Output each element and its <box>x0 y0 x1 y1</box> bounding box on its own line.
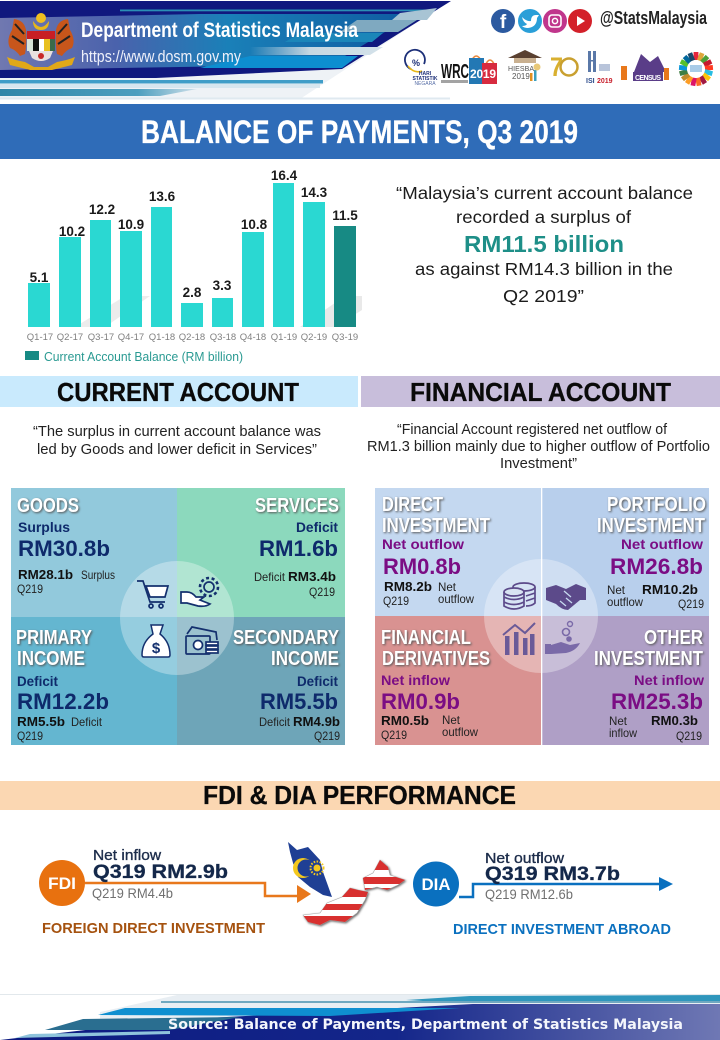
FDI figures: Net inflow <box>93 847 161 864</box>
primary income: Q219 <box>17 729 43 743</box>
financial derivatives: Net inflow <box>381 672 450 688</box>
bar chart: current account balance: 10.8 <box>241 217 268 232</box>
social icons <box>491 9 592 33</box>
goods: GOODS <box>17 495 79 517</box>
portfolio investment: RM10.2b <box>642 582 698 597</box>
bar chart: current account balance: Q1-19 <box>271 332 297 343</box>
FDI figures: Q319 RM2.9b <box>93 861 228 883</box>
icon: coin stacks <box>504 583 535 609</box>
text: financial account summary: “Financial Account registered net outflow of <box>397 421 668 438</box>
heading: FDI and DIA performance: FDI & DIA PERFORMANCE <box>203 780 516 810</box>
financial derivatives <box>381 627 490 742</box>
social icons: f <box>500 12 507 33</box>
direct investment: DIRECT <box>382 494 443 516</box>
primary income: Deficit <box>17 673 58 689</box>
secondary income: Deficit <box>259 715 291 729</box>
partner logos: 7 <box>550 52 563 82</box>
other investment: Net <box>609 714 628 728</box>
DIA figures: Net outflow <box>485 850 564 867</box>
text: current account summary: “The surplus in current account balance was <box>33 423 321 440</box>
other investment: Net inflow <box>634 672 704 688</box>
badge: FDI <box>39 860 85 906</box>
other investment: RM25.3b <box>611 689 703 714</box>
title band: BALANCE OF PAYMENTS, Q3 2019 <box>141 114 578 150</box>
bar chart: current account balance: 13.6 <box>149 189 176 204</box>
icon: hand with gear <box>181 578 218 606</box>
financial derivatives: DERIVATIVES <box>382 648 490 670</box>
secondary income: Q219 <box>314 729 340 743</box>
direct investment <box>382 494 490 608</box>
financial derivatives: Net <box>442 713 461 727</box>
icon: money bag: $ <box>152 640 161 657</box>
portfolio investment <box>597 494 706 611</box>
header banner <box>0 1 451 100</box>
title band <box>0 104 720 159</box>
partner logos: WRC <box>441 61 469 83</box>
header title: Department of Statistics Malaysia <box>81 19 358 42</box>
badge: DIA <box>413 862 459 906</box>
label: foreign direct investment: FOREIGN DIRECT INVESTMENT <box>42 920 265 937</box>
quote: current account surplus <box>396 183 693 306</box>
secondary income: RM4.9b <box>293 714 340 729</box>
icon: money bag <box>142 625 170 657</box>
other investment: RM0.3b <box>651 713 698 728</box>
other investment: INVESTMENT <box>594 648 703 670</box>
other investment: Q219 <box>676 729 702 743</box>
arrow: FDI flow <box>85 883 311 903</box>
partner logos: 2019 <box>597 78 613 85</box>
direct investment: Q219 <box>383 594 409 608</box>
primary income: RM12.2b <box>17 689 109 714</box>
goods: RM30.8b <box>18 536 110 561</box>
quote: current account surplus: “Malaysia’s current account balance <box>396 183 693 203</box>
text: financial account summary: RM1.3 billion mainly due to higher outflow of Portfolio <box>367 438 710 455</box>
portfolio investment: Q219 <box>678 597 704 611</box>
arrow: DIA flow <box>459 877 673 897</box>
services <box>254 495 339 599</box>
other investment: inflow <box>609 726 637 740</box>
bar chart: current account balance <box>25 168 362 364</box>
services: Deficit <box>296 519 338 535</box>
panel: financial account quadrants <box>375 488 709 745</box>
bar chart: current account balance: Q3-17 <box>88 332 114 343</box>
icon: hand with coins <box>545 622 580 654</box>
bar chart: current account balance: Q3-19 <box>332 332 358 343</box>
text: financial account summary: Investment” <box>500 455 577 472</box>
DIA figures: Q219 RM12.6b <box>485 886 573 902</box>
financial derivatives: RM0.9b <box>381 689 460 714</box>
partner logos: NEGARA <box>414 81 436 87</box>
financial derivatives: RM0.5b <box>381 713 429 728</box>
services: RM1.6b <box>259 536 338 561</box>
services: Deficit <box>254 570 286 584</box>
partner logos: % <box>412 58 420 68</box>
badge: DIA: DIA <box>422 875 450 894</box>
services: RM3.4b <box>288 569 336 584</box>
text: current account summary: led by Goods and lower deficit in Services” <box>37 441 317 458</box>
DIA figures: Q319 RM3.7b <box>485 863 620 885</box>
direct investment: Net <box>438 580 457 594</box>
direct investment: outflow <box>438 592 474 606</box>
portfolio investment: Net outflow <box>621 536 703 552</box>
direct investment: RM0.8b <box>383 554 461 579</box>
bar chart: current account balance: Q1-18 <box>149 332 175 343</box>
bar chart: current account balance: 2.8 <box>183 285 202 300</box>
partner logos: 2019 <box>512 72 530 81</box>
primary income: INCOME <box>17 648 85 670</box>
icon: banknotes and coins <box>186 627 218 654</box>
bar chart: current account balance: 10.9 <box>118 217 144 232</box>
Sarawak <box>300 887 372 928</box>
bar chart: current account balance: Q3-18 <box>210 332 236 343</box>
icon: shopping cart <box>137 581 168 608</box>
footer banner <box>0 994 720 1040</box>
partner logos: 2019 <box>470 67 496 81</box>
other investment: OTHER <box>644 627 703 649</box>
bar chart: current account balance: 12.2 <box>89 202 115 217</box>
services: SERVICES <box>255 495 339 517</box>
heading: current account: CURRENT ACCOUNT <box>57 377 299 407</box>
partner logos <box>405 50 713 87</box>
bar chart: current account balance: 11.5 <box>332 208 358 223</box>
secondary income: Deficit <box>297 673 338 689</box>
bar chart: current account balance: Current Account Balance (RM billion) <box>44 349 243 364</box>
secondary income <box>233 627 340 743</box>
secondary income: RM5.5b <box>260 689 338 714</box>
quote: current account surplus: recorded a surplus of <box>456 207 631 227</box>
portfolio investment: Net <box>607 583 626 597</box>
financial derivatives: FINANCIAL <box>381 627 471 649</box>
quote: current account surplus: RM11.5 billion <box>464 231 624 257</box>
quote: current account surplus: as against RM14.3 billion in the <box>415 259 673 279</box>
partner logos: STATISTIK <box>412 76 438 82</box>
icon: growth chart <box>503 623 535 655</box>
bar chart: current account balance: Q4-18 <box>240 332 266 343</box>
bar chart: current account balance: Q2-19 <box>301 332 327 343</box>
peninsular Malaysia <box>288 842 332 897</box>
partner logos: HARI <box>419 71 432 77</box>
text: current account summary <box>33 423 321 458</box>
services: Q219 <box>309 585 335 599</box>
goods <box>17 495 115 596</box>
partner logos: ISI <box>586 78 595 85</box>
goods: Surplus <box>81 568 115 582</box>
financial derivatives: Q219 <box>381 728 407 742</box>
label: direct investment abroad: DIRECT INVESTMENT ABROAD <box>453 921 671 938</box>
icon: coat of arms <box>7 13 75 70</box>
primary income <box>16 627 109 743</box>
bar chart: current account balance: 14.3 <box>301 185 328 200</box>
other investment <box>594 627 704 743</box>
bar chart: current account balance: Q4-17 <box>118 332 144 343</box>
primary income: PRIMARY <box>16 627 93 649</box>
goods: Surplus <box>18 519 70 535</box>
direct investment: Net outflow <box>382 536 464 552</box>
bar chart: current account balance: Q2-17 <box>57 332 83 343</box>
financial derivatives: outflow <box>442 725 478 739</box>
heading: FDI and DIA performance <box>0 780 720 810</box>
direct investment: INVESTMENT <box>382 515 490 537</box>
direct investment: RM8.2b <box>384 579 432 594</box>
goods: RM28.1b <box>18 567 73 582</box>
primary income: RM5.5b <box>17 714 65 729</box>
portfolio investment: RM26.8b <box>610 554 703 579</box>
portfolio investment: outflow <box>607 595 643 609</box>
bar chart: current account balance: Q2-18 <box>179 332 205 343</box>
header url: https://www.dosm.gov.my <box>81 47 241 66</box>
quote: current account surplus: Q2 2019” <box>503 286 584 306</box>
secondary income: SECONDARY <box>233 627 340 649</box>
map of Malaysia <box>288 842 410 928</box>
DIA figures <box>485 850 620 902</box>
bar chart: current account balance: Q1-17 <box>27 332 53 343</box>
source text: Source: Balance of Payments, Department of Statistics Malaysia <box>168 1017 683 1033</box>
FDI figures <box>92 847 228 901</box>
icon: handshake <box>546 584 586 610</box>
goods: Q219 <box>17 582 43 596</box>
bar chart: current account balance: 10.2 <box>59 224 85 239</box>
heading: financial account: FINANCIAL ACCOUNT <box>410 377 671 407</box>
panel: current account quadrants <box>11 488 345 745</box>
badge: FDI: FDI <box>48 874 76 893</box>
text: financial account summary <box>367 421 710 472</box>
bar chart: current account balance: 3.3 <box>213 278 232 293</box>
bar chart: current account balance: 16.4 <box>271 168 298 183</box>
FDI figures: Q219 RM4.4b <box>92 885 173 901</box>
primary income: Deficit <box>71 715 103 729</box>
secondary income: INCOME <box>271 648 339 670</box>
bar chart: current account balance: 5.1 <box>30 270 49 285</box>
partner logos: CENSUS <box>635 75 661 82</box>
Sabah <box>360 858 410 891</box>
partner logos: HIESBA <box>508 66 534 73</box>
